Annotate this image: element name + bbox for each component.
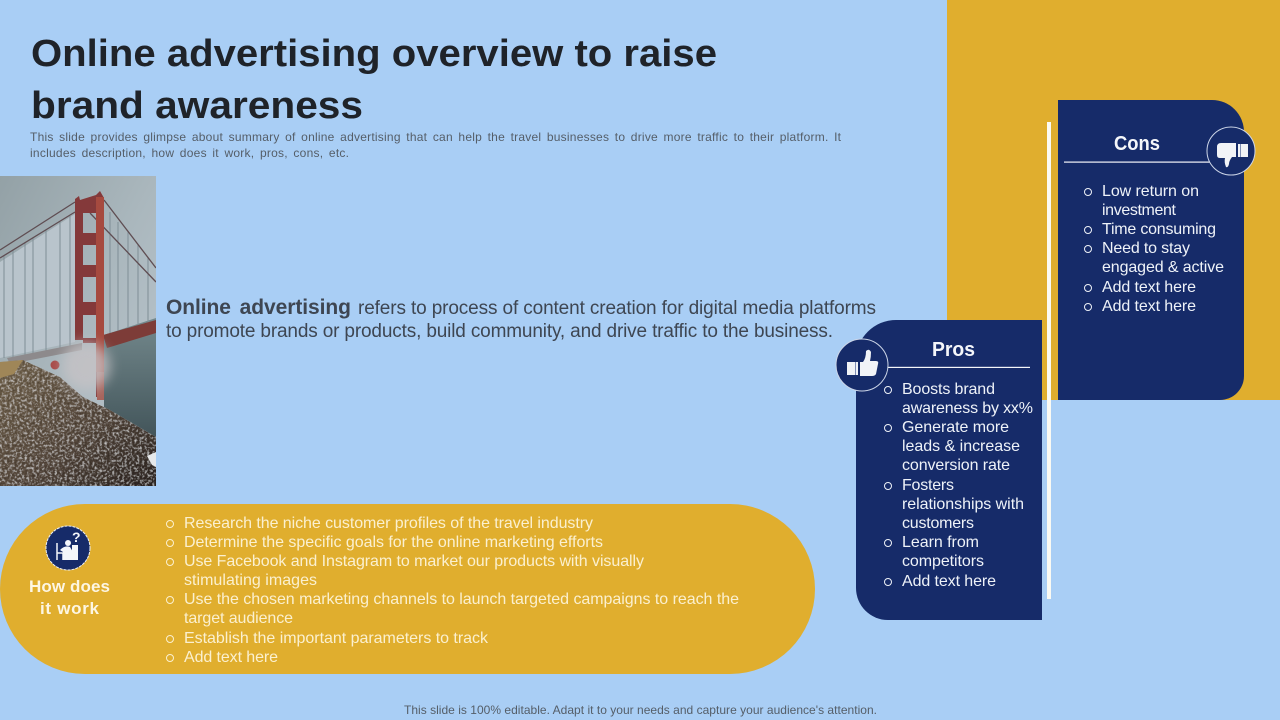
footer note: This slide is 100% editable. Adapt it to your needs and capture your audience's attention. (404, 703, 877, 717)
cons list: investment (1102, 202, 1177, 219)
cons heading: Cons (1114, 133, 1160, 155)
pros heading: Pros (932, 339, 975, 361)
yellow corner panel (947, 0, 1280, 400)
cons list: Add text here (1102, 279, 1196, 296)
how it works list: target audience (184, 610, 293, 627)
cons list: engaged & active (1102, 259, 1224, 276)
pros list: relationships with (902, 496, 1024, 513)
how does it work label (29, 577, 110, 618)
panel: how does it work (0, 504, 815, 674)
subtitle description: includes description, how does it work, pros, cons, etc. (30, 146, 349, 160)
title: Online advertising overview to raise (31, 33, 717, 75)
white vertical divider (1047, 122, 1051, 599)
how it works list: Use the chosen marketing channels to launch targeted campaigns to reach the (184, 591, 739, 608)
online advertising definition: Online advertising (166, 296, 351, 319)
cons list (1084, 183, 1224, 315)
title: brand awareness (31, 85, 363, 127)
how it works list: Research the niche customer profiles of the travel industry (184, 515, 593, 532)
cons list: Low return on (1102, 183, 1199, 200)
icon: person at desk with question (46, 526, 90, 570)
photo: Golden Gate Bridge in fog (0, 176, 156, 486)
how it works list: stimulating images (184, 572, 317, 589)
online advertising definition: to promote brands or products, build community, and drive traffic to the business. (166, 321, 833, 342)
cons list: Need to stay (1102, 240, 1190, 257)
panel: cons (1058, 100, 1255, 400)
how does it work label: How does (29, 577, 110, 596)
pros list: Fosters (902, 477, 954, 494)
cons list: Add text here (1102, 298, 1196, 315)
cons list: Time consuming (1102, 221, 1216, 238)
how it works list: Add text here (184, 649, 278, 666)
pros list: leads & increase (902, 438, 1020, 455)
pros list: Learn from (902, 534, 979, 551)
icon: thumbs up (836, 339, 888, 391)
icon: thumbs down (1207, 127, 1255, 175)
pros list: Add text here (902, 573, 996, 590)
subtitle description (30, 130, 842, 160)
pros list: competitors (902, 553, 984, 570)
pros list (884, 381, 1033, 590)
how it works list: Use Facebook and Instagram to market our products with visually (184, 553, 644, 570)
subtitle description: This slide provides glimpse about summary of online advertising that can help the travel businesses to drive more traffic to their platform. It (30, 130, 842, 144)
pros list: customers (902, 515, 974, 532)
online advertising definition (166, 296, 876, 342)
title (31, 33, 717, 127)
pros list: awareness by xx% (902, 400, 1033, 417)
pros list: Generate more (902, 419, 1009, 436)
how it works list: Determine the specific goals for the online marketing efforts (184, 534, 603, 551)
how does it work label: it work (40, 599, 100, 618)
pros list: Boosts brand (902, 381, 995, 398)
online advertising definition: refers to process of content creation for digital media platforms (358, 298, 876, 319)
how it works list (166, 515, 739, 666)
panel: pros (836, 320, 1042, 620)
how it works list: Establish the important parameters to track (184, 630, 489, 647)
icon: person at desk with question: ? (72, 529, 81, 545)
pros list: conversion rate (902, 457, 1010, 474)
